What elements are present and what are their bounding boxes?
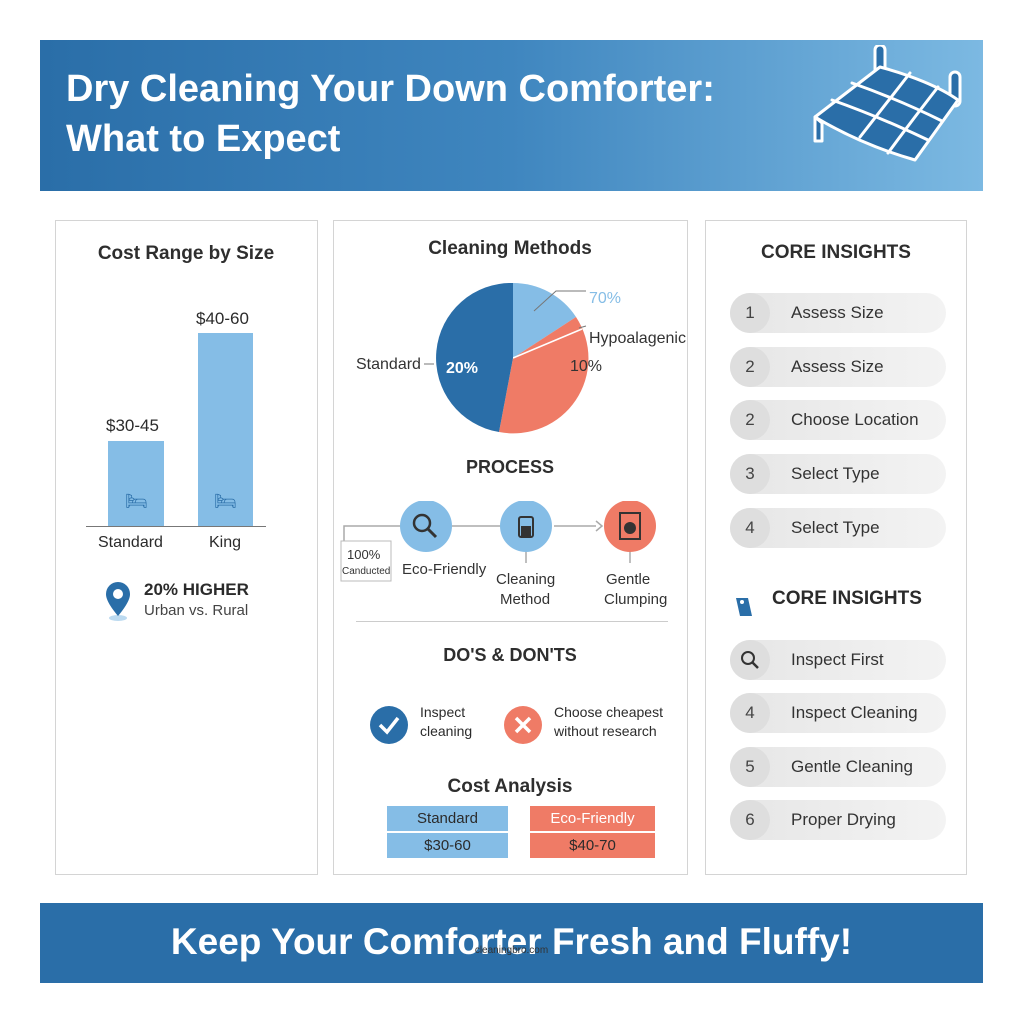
footer banner: cleaningbro.com: [475, 945, 548, 956]
bar chart: 🛏: [125, 491, 148, 511]
process flow: Cleaning: [496, 571, 555, 588]
insight list: Inspect First: [791, 650, 884, 669]
do item: [370, 704, 472, 744]
title: Dry Cleaning Your Down Comforter:: [66, 68, 715, 110]
process flow: Method: [500, 591, 550, 608]
callout: urban premium: Urban vs. Rural: [144, 602, 248, 619]
bar chart: $40-60: [196, 309, 249, 328]
step list: 2: [745, 410, 755, 429]
icon: bed: [813, 45, 962, 162]
bar chart: [86, 309, 266, 551]
step list: Choose Location: [791, 410, 919, 429]
heading: dos and donts: DO'S & DON'TS: [443, 645, 577, 665]
title: [66, 68, 715, 160]
callout: urban premium: [106, 580, 249, 621]
footer text: Keep Your Comforter Fresh and Fluffy!: [171, 921, 852, 962]
heading: cleaning methods: Cleaning Methods: [428, 238, 592, 259]
step list: 2: [745, 357, 755, 376]
pie chart: 20%: [446, 360, 478, 377]
process flow: Canducted: [342, 566, 390, 577]
panel: methods/process: [333, 220, 688, 875]
process flow: Clumping: [604, 591, 667, 608]
panel: core insights: [705, 220, 967, 875]
cost table: Eco-Friendly: [550, 810, 635, 827]
bar chart: 🛏: [214, 491, 237, 511]
title: What to Expect: [66, 118, 340, 160]
dont item: [504, 704, 663, 744]
insight list: 5: [745, 757, 755, 776]
cost table: Standard: [417, 810, 478, 827]
header banner: [40, 40, 983, 191]
heading: Cost Range by Size: [98, 243, 274, 264]
pie chart: [356, 283, 686, 434]
step list: 4: [745, 518, 755, 537]
cost table: $30-60: [424, 837, 471, 854]
step list: Select Type: [791, 518, 880, 537]
cost table: [387, 806, 655, 858]
step list: 1: [745, 303, 755, 322]
step list: 3: [745, 464, 755, 483]
insight list: [730, 640, 946, 840]
process flow: Gentle: [606, 571, 650, 588]
do item: Inspect: [420, 704, 465, 720]
pie chart: Standard: [356, 356, 421, 373]
process flow: 100%: [347, 547, 381, 562]
bar chart: King: [209, 534, 241, 551]
do item: cleaning: [420, 723, 472, 739]
pie chart: 70%: [589, 290, 621, 307]
insight list: 4: [745, 703, 755, 722]
heading: core insights 1: CORE INSIGHTS: [761, 242, 911, 263]
step list: [730, 293, 946, 548]
bar chart: $30-45: [106, 416, 159, 435]
insight list: Proper Drying: [791, 810, 896, 829]
heading: cost analysis: Cost Analysis: [448, 776, 572, 797]
heading: core insights 2: CORE INSIGHTS: [772, 588, 922, 609]
pie chart: 10%: [570, 358, 602, 375]
step list: Select Type: [791, 464, 880, 483]
dont item: Choose cheapest: [554, 704, 663, 720]
insight list: Gentle Cleaning: [791, 757, 913, 776]
process flow: Eco-Friendly: [402, 561, 487, 578]
pie chart: Hypoalagenic: [589, 330, 686, 347]
bar chart: Standard: [98, 534, 163, 551]
step list: Assess Size: [791, 357, 884, 376]
callout: urban premium: 20% HIGHER: [144, 580, 249, 599]
insight list: Inspect Cleaning: [791, 703, 918, 722]
insight list: 6: [745, 810, 755, 829]
process flow: [340, 501, 667, 608]
dont item: without research: [554, 723, 657, 739]
heading: process: PROCESS: [466, 457, 554, 477]
footer banner: [40, 903, 983, 983]
cost table: $40-70: [569, 837, 616, 854]
panel: cost range: [55, 220, 318, 875]
heading: core insights 2: [736, 588, 922, 616]
step list: Assess Size: [791, 303, 884, 322]
